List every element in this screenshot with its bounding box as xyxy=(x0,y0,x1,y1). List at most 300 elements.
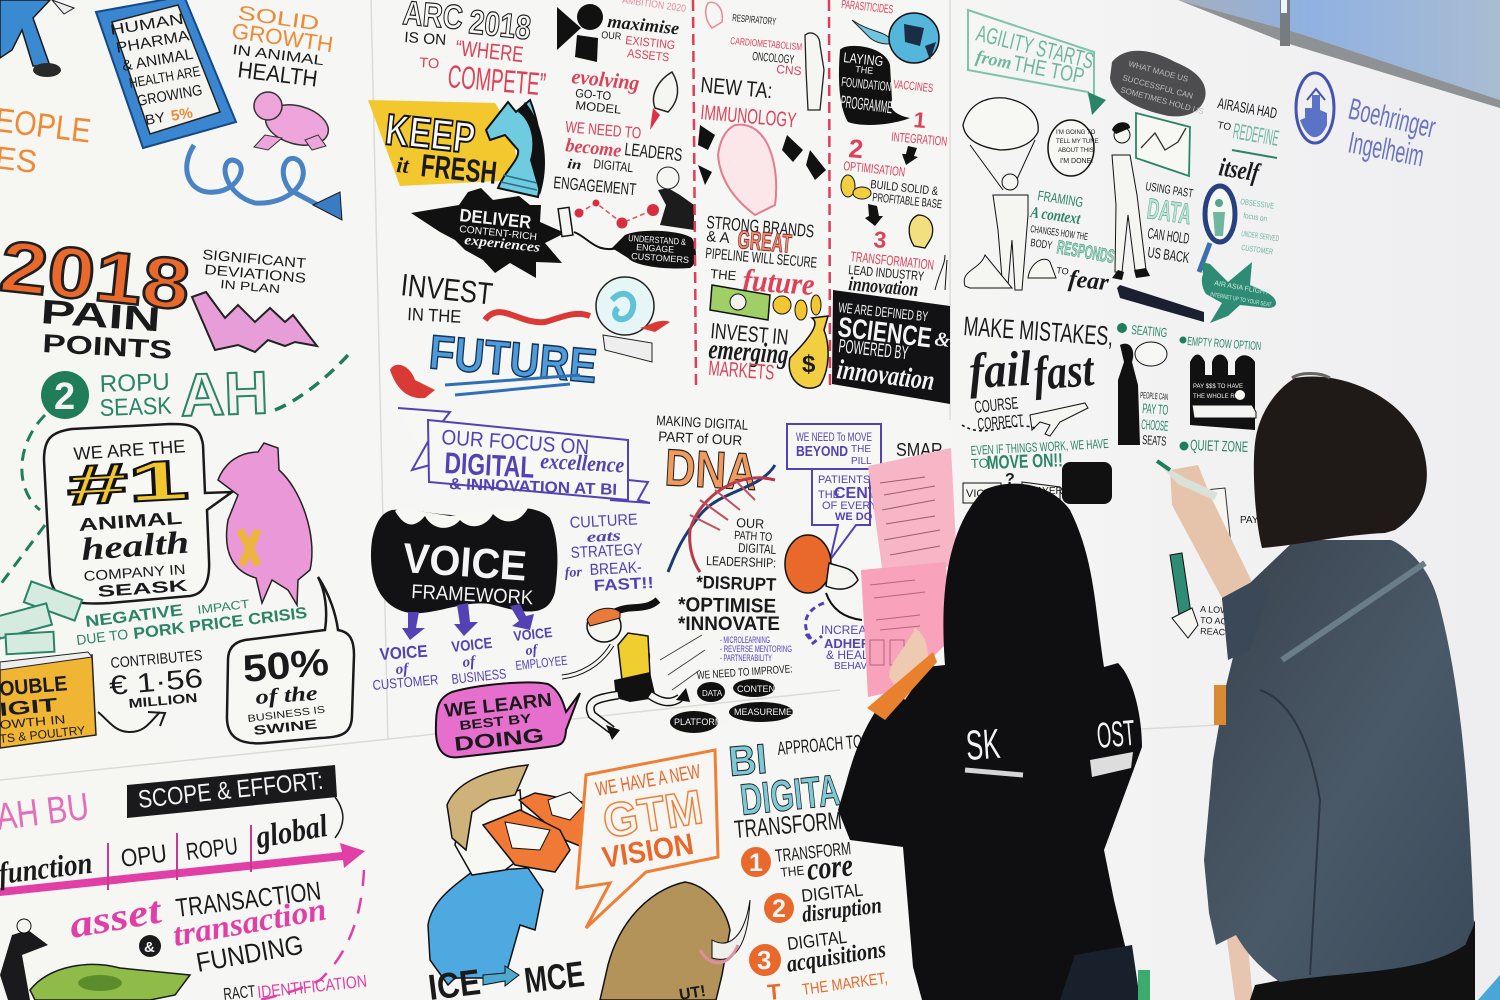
text and icon: maximise existing assets: maximise xyxy=(607,11,680,39)
logo: Boehringer Ingelheim: Ingelheim xyxy=(1346,126,1427,173)
text: our path to digital leadership: PATH TO xyxy=(734,528,773,544)
column: new TA immunology: PIPELINE WILL SECURE xyxy=(705,245,818,272)
text: seating and pay to choose: SEATING xyxy=(1131,322,1168,340)
text: voice of customer, business, employee: VOICE xyxy=(379,642,428,664)
speech cloud: what makes success: WHAT MADE US xyxy=(1127,59,1189,84)
text: solid growth: HEALTH xyxy=(236,56,319,92)
text: framing a context xyxy=(1029,187,1116,296)
panel: human pharma tablet xyxy=(0,0,342,220)
text: ICE to MCE: MCE xyxy=(522,953,587,1000)
starburst: deliver content-rich experiences: CONTENT-RICH xyxy=(459,224,537,243)
text: we need to become leaders in digital engagement: WE NEED TO xyxy=(565,119,642,143)
text: culture eats strategy: eats xyxy=(586,528,621,546)
logo: Boehringer Ingelheim: Boehringer xyxy=(1345,93,1439,145)
text and icon: evolving go-to model: GO-TO xyxy=(575,86,612,103)
illustration: boy with binoculars xyxy=(428,765,600,985)
heading and list: BI digital transformation: TRANSFORM xyxy=(733,807,843,844)
text: asset transaction funding: transaction xyxy=(170,891,329,953)
column: new TA immunology: INVEST IN xyxy=(710,318,789,350)
text: make mistakes fail fast: fast xyxy=(1031,343,1097,401)
text: ICE to MCE xyxy=(426,953,707,1000)
text: negative impact: IMPACT xyxy=(197,597,251,617)
text: culture eats strategy: BREAK- xyxy=(589,559,642,579)
illustration: parachutist with speech bubble: ABOUT THIS xyxy=(1058,148,1094,154)
callout: beyond the pill: WE DO xyxy=(835,511,873,523)
panel: defined by science: SCIENCE xyxy=(836,311,933,353)
text: invest in the future with crystal ball: FUTURE xyxy=(427,326,599,394)
text: quiet zone xyxy=(1180,437,1248,456)
banner: keep it fresh with chess knight: FRESH xyxy=(419,147,499,191)
column: laying the foundation programme: BUILD SOLID & xyxy=(870,177,939,198)
callout: we are the #1 animal health: WE ARE THE xyxy=(73,436,186,464)
heading and list: BI digital transformation: disruption xyxy=(801,892,883,927)
text: our path to digital leadership: OUR xyxy=(736,515,765,531)
panel: human pharma tablet: & ANIMAL xyxy=(121,46,195,75)
sticky note: top xyxy=(868,448,957,590)
callout: beyond the pill: OF EVERYT xyxy=(822,500,884,512)
speech mouth: voice framework xyxy=(371,508,557,613)
starburst: deliver content-rich experiences: experiences xyxy=(464,233,541,256)
callout: we are the #1 animal health: SEASK xyxy=(97,578,189,601)
callout: beyond the pill xyxy=(787,424,900,560)
heading: focus of arc 2018: 2018 xyxy=(467,3,533,47)
banner: double digit growth: OWTH IN xyxy=(0,712,66,732)
text: increase adherence: & HEAL xyxy=(826,648,869,662)
text: invest in the future with crystal ball xyxy=(390,267,670,398)
text: framing a context: BODY xyxy=(1030,237,1053,252)
banner: double digit growth: TS & POULTRY xyxy=(0,723,86,746)
column: new TA immunology: ONCOLOGY xyxy=(752,49,795,67)
text: we need to become leaders in digital engagement xyxy=(553,119,683,199)
person: woman in black hoodie: OST xyxy=(1095,712,1137,756)
speech mouth: voice framework: FRAMEWORK xyxy=(411,581,534,609)
callout: beyond the pill: WE NEED To MOVE xyxy=(796,430,872,444)
text: our path to digital leadership: *OPTIMISE xyxy=(678,594,776,618)
heading and list: BI digital transformation: 3 xyxy=(757,945,771,975)
panel: defined by science xyxy=(832,290,952,404)
text: smart fragment: SMAR- xyxy=(896,440,948,460)
column: new TA immunology: CNS xyxy=(776,62,802,78)
callout: new GTM vision: GTM xyxy=(599,781,706,849)
illustration: runner xyxy=(562,600,705,740)
heading: 2018 pain points: 2018 xyxy=(0,226,194,326)
text: low cost fragment with tag icon: PAY xyxy=(1240,515,1259,526)
text: low cost fragment with tag icon xyxy=(1170,488,1259,638)
column: laying the foundation programme: INTEGRATION xyxy=(891,129,948,149)
panel: human pharma tablet: HUMAN xyxy=(109,11,185,39)
text: airasia had to redefine itself: TO xyxy=(1216,120,1232,133)
text: we need to become leaders in digital engagement: become xyxy=(564,135,623,162)
heading: focus of arc 2018: IS ON xyxy=(404,29,447,49)
photo of graphic recording wall: REDEFINE xyxy=(1231,118,1281,151)
heading and list: BI digital transformation xyxy=(727,732,889,1000)
icon: magnifying glass: UNDER SERVED xyxy=(1241,229,1280,243)
text: asset transaction funding: asset xyxy=(66,889,166,947)
text: invest in the future with crystal ball: IN THE xyxy=(407,304,462,327)
icon: magnifying glass: focus on xyxy=(1243,211,1268,223)
banner: double digit growth: OUBLE xyxy=(0,672,68,701)
text: invest in the future with crystal ball: INVEST xyxy=(399,267,494,312)
callout: we learn best by doing: WE LEARN xyxy=(443,690,553,722)
column: new TA immunology: NEW TA: xyxy=(700,72,773,103)
column: new TA immunology: CARDIOMETABOLISM xyxy=(730,36,802,53)
heading and list: BI digital transformation: 2 xyxy=(772,895,786,923)
text: voice of customer, business, employee: VOICE xyxy=(513,624,553,644)
column: new TA immunology: GREAT xyxy=(736,224,793,259)
window strip top right xyxy=(1178,0,1500,108)
heading and list: BI digital transformation: DIGITAL xyxy=(800,880,864,906)
text: our path to digital leadership: DIGITAL xyxy=(738,540,777,557)
text: we need to become leaders in digital engagement: DIGITAL xyxy=(593,156,634,175)
text: low cost fragment with tag icon: A LOW C xyxy=(1200,604,1238,616)
column: laying the foundation programme: 2 xyxy=(847,133,865,164)
column: new TA immunology xyxy=(698,2,828,388)
illustration: man and data chart: USING PAST xyxy=(1145,179,1195,201)
panel: defined by science: & xyxy=(933,328,952,352)
text: ROPU SEASK AH xyxy=(0,355,348,585)
text: ROPU SEASK AH: SEASK xyxy=(99,393,172,422)
panel: defined by science: POWERED BY xyxy=(837,336,909,364)
callout: new GTM vision: VISION xyxy=(600,828,696,875)
text: ROPU SEASK AH: AH xyxy=(179,359,269,429)
banner: keep it fresh with chess knight: it xyxy=(396,152,411,178)
panel: human pharma tablet: HEALTH ARE xyxy=(128,63,201,91)
text: voice of customer, business, employee: EMPLOYEE xyxy=(515,653,568,673)
text: our path to digital leadership: *DISRUPT xyxy=(696,572,777,595)
banner: our focus on digital excellence: excellence xyxy=(540,448,625,477)
text: seating and pay to choose: SEATS xyxy=(1142,432,1167,449)
text and bubbles: we need to improve: CONTENT xyxy=(737,684,781,694)
callout: beyond the pill: THE xyxy=(851,444,871,455)
illustration: parachutist with speech bubble: TELL MY TUNE xyxy=(1056,139,1099,145)
text: make mistakes fail fast: EVEN IF THINGS WORK, WE HAVE xyxy=(970,436,1109,458)
panel: human pharma tablet: BY xyxy=(144,109,167,128)
text: victim player xyxy=(963,471,1063,503)
data line and speech bubble: understand and engage customers: UNDERSTAND & xyxy=(628,233,686,247)
text and icon: evolving go-to model: evolving xyxy=(570,64,641,95)
text and chart: significant deviations in plan: IN PLAN xyxy=(220,277,281,296)
text: negative impact: NEGATIVE xyxy=(84,602,184,631)
text and bubbles: we need to improve xyxy=(670,663,805,733)
heading and list: BI digital transformation: DIGITAL xyxy=(786,927,848,954)
text: contributes 1.56 million xyxy=(98,647,204,732)
icon: magnifying glass: OBSESSIVE xyxy=(1240,197,1275,211)
text: victim player: ? xyxy=(1005,471,1015,488)
text: increase adherence xyxy=(821,623,882,672)
speech mouth: voice framework: VOICE xyxy=(401,534,528,590)
heading: focus of arc 2018: TO xyxy=(419,54,440,71)
illustration: man and data chart: DATA xyxy=(1145,193,1193,231)
text: negative impact: PORK PRICE CRISIS xyxy=(132,605,309,643)
text: voice of customer, business, employee: of xyxy=(395,661,411,678)
speech cloud: what makes success: SUCCESSFUL CAN xyxy=(1121,73,1194,101)
text: contributes 1.56 million: CONTRIBUTES xyxy=(110,647,203,672)
timeline arrow: function OPU ROPU global xyxy=(0,807,365,1000)
illustration: parachutist with speech bubble xyxy=(963,98,1099,290)
banner: agility starts from the top: AGILITY STARTS xyxy=(974,20,1097,74)
text: solid growth xyxy=(230,2,335,92)
callout: 50% of the business is swine xyxy=(227,577,354,743)
text and icon: empty row option: PAY $$$ TO HAVE xyxy=(1193,384,1243,390)
banner: agility starts from the top: THE TOP xyxy=(1011,50,1086,89)
banner: keep it fresh with chess knight xyxy=(368,100,545,197)
label: scope and effort: SCOPE & EFFORT: xyxy=(137,767,325,814)
panel: human pharma tablet: GROWING xyxy=(136,82,204,110)
person legs xyxy=(0,0,50,66)
text and bubbles: we need to improve: PLATFORMS xyxy=(674,717,728,727)
text: make mistakes fail fast: CORRECT xyxy=(977,411,1024,434)
text: our path to digital leadership: LEADERSHIP: xyxy=(706,553,776,570)
heading: 2018 pain points: POINTS xyxy=(42,328,173,365)
data line and speech bubble: understand and engage customers xyxy=(558,167,696,269)
speech cloud: what makes success: SOMETIMES HOLD US xyxy=(1119,85,1205,116)
icon: flying pink pig xyxy=(254,92,333,152)
callout: 50% of the business is swine: of the xyxy=(255,681,318,709)
heading and list: BI digital transformation: 1 xyxy=(749,849,763,877)
text and chart: significant deviations in plan: SIGNIFICANT xyxy=(202,246,307,271)
column: laying the foundation programme: TRANSFORMATION xyxy=(850,248,935,273)
column: laying the foundation programme: FOUNDATION xyxy=(841,74,892,94)
callout: we are the #1 animal health: ANIMAL xyxy=(78,508,183,535)
photo of graphic recording wall: PEOPLE CAN xyxy=(1140,390,1168,402)
text and icon: maximise existing assets xyxy=(557,0,687,64)
illustration: woolly mammoth xyxy=(600,882,750,1000)
text: voice of customer, business, employee: VOICE xyxy=(451,635,493,656)
text: increase adherence: ADHER xyxy=(824,636,871,651)
panel seams xyxy=(0,0,1220,780)
callout: we are the #1 animal health: COMPANY IN xyxy=(83,561,186,584)
text: voice of customer, business, employee: BUSINESS xyxy=(451,665,507,687)
panel: defined by science: innovation xyxy=(835,354,936,397)
heading and list: BI digital transformation: BI xyxy=(727,735,769,785)
text: solid growth: IN ANIMAL xyxy=(232,41,325,68)
callout: we learn best by doing: DOING xyxy=(453,725,545,756)
heading and list: BI digital transformation: TRANSFORM xyxy=(774,838,852,866)
column: laying the foundation programme: LEAD INDUSTRY xyxy=(848,262,925,284)
icon: black square xyxy=(1062,462,1112,504)
text: make mistakes fail fast: fail xyxy=(968,340,1033,399)
timeline arrow: function OPU ROPU global: OPU xyxy=(119,840,168,873)
text: culture eats strategy xyxy=(564,511,654,595)
column: new TA immunology: future xyxy=(742,262,816,302)
banner: keep it fresh with chess knight: KEEP xyxy=(383,105,478,163)
text and icon: maximise existing assets: OUR xyxy=(601,30,622,43)
timeline arrow: function OPU ROPU global: ROPU xyxy=(184,833,239,866)
heading: focus of arc 2018 xyxy=(401,0,547,103)
callout: we are the #1 animal health: health xyxy=(80,524,190,567)
text: increase adherence: INCREASE xyxy=(821,623,882,637)
text and icon: evolving go-to model: MODEL xyxy=(575,98,622,117)
text: solid growth: GROWTH xyxy=(230,18,335,57)
icon: running man on green money xyxy=(0,919,190,1000)
callout: beyond the pill: THE xyxy=(818,489,840,501)
column: new TA immunology: & A xyxy=(706,228,730,247)
illustration: man and data chart: US BACK xyxy=(1146,244,1190,267)
callout: new GTM vision: WE HAVE A NEW xyxy=(594,761,702,801)
text: asset transaction funding: TRANSACTION xyxy=(174,875,323,923)
heading: focus of arc 2018: “WHERE xyxy=(454,35,525,67)
text: framing a context: TO xyxy=(1056,265,1069,277)
text: voice of customer, business, employee xyxy=(372,603,568,693)
callout: beyond the pill: BEYOND xyxy=(796,443,848,460)
heading: making digital part of our DNA: PART of OUR xyxy=(658,428,743,448)
text and chart: significant deviations in plan: DEVIATIONS xyxy=(204,261,307,286)
text: negative impact: DUE TO xyxy=(75,626,129,648)
text: low cost fragment with tag icon: TO ACQ xyxy=(1200,615,1234,627)
illustration: green airplane: INTERNET UP TO YOUR SEAT xyxy=(1210,292,1272,309)
heading and list: BI digital transformation: THE xyxy=(780,863,805,880)
text: voice of customer, business, employee: of xyxy=(525,643,539,659)
stethoscope tube xyxy=(187,145,318,205)
heading and list: BI digital transformation: APPROACH TO xyxy=(777,732,863,760)
illustration: parachutist with speech bubble: I'M GOING TO xyxy=(1056,130,1096,136)
heading and list: BI digital transformation: acquisitions xyxy=(785,937,888,978)
text: culture eats strategy: for xyxy=(564,565,583,581)
text: ROPU SEASK AH: ROPU xyxy=(99,369,170,398)
text: make mistakes fail fast: MOVE ON!! xyxy=(986,450,1063,474)
text: seating and pay to choose xyxy=(1117,322,1169,449)
text: negative impact xyxy=(75,597,309,648)
icon: magnifying glass xyxy=(1199,186,1280,272)
column: laying the foundation programme: THE xyxy=(855,64,874,76)
callout: beyond the pill: CENTRE xyxy=(834,485,900,502)
starburst: deliver content-rich experiences: DELIVER xyxy=(459,205,532,233)
text: our path to digital leadership: *INNOVATE xyxy=(678,614,780,635)
callout: 50% of the business is swine: SWINE xyxy=(253,716,318,738)
text: we need to become leaders in digital engagement: in xyxy=(567,157,582,173)
person: woman in black hoodie: SK xyxy=(964,720,1002,769)
column: laying the foundation programme: PROGRAMME xyxy=(840,92,893,117)
text and bubbles: we need to improve: DATA xyxy=(702,689,723,698)
column: laying the foundation programme: PROFITABLE BASE xyxy=(872,190,943,211)
text: our path to digital leadership xyxy=(678,515,792,663)
column: new TA immunology: THE xyxy=(710,266,737,283)
text and chart: significant deviations in plan xyxy=(192,246,317,352)
callout: we learn best by doing xyxy=(436,682,580,757)
text and icon: maximise existing assets: ASSETS xyxy=(627,46,670,64)
column: new TA immunology: MARKETS xyxy=(708,357,775,385)
text: framing a context: RESPONDS xyxy=(1055,237,1116,268)
banner: our focus on digital excellence: DIGITAL xyxy=(444,447,535,485)
data line and speech bubble: understand and engage customers: ENGAGE xyxy=(636,242,674,255)
text: airasia had to redefine itself: AIRASIA HAD xyxy=(1216,95,1278,122)
text: voice of customer, business, employee: CUSTOMER xyxy=(372,671,439,693)
callout: we are the #1 animal health: #1 xyxy=(65,448,190,517)
text and icon: empty row option: EMPTY ROW OPTION xyxy=(1187,334,1262,353)
illustration: green airplane: AIR ASIA FLIGHT xyxy=(1214,280,1270,297)
text: we need to become leaders in digital engagement: ENGAGEMENT xyxy=(553,173,637,199)
text: make mistakes fail fast: MAKE MISTAKES, xyxy=(963,311,1114,351)
column: new TA immunology: STRONG BRANDS xyxy=(706,212,815,241)
text: contributes 1.56 million: € 1·56 xyxy=(108,663,204,701)
column: laying the foundation programme: 1 xyxy=(913,107,927,133)
panel: defined by science: WE ARE DEFINED BY xyxy=(838,299,929,324)
text: culture eats strategy: CULTURE xyxy=(569,511,638,532)
callout: beyond the pill: PATIENTS AT xyxy=(818,474,886,486)
text and icon: empty row option: THE WHOLE ROW xyxy=(1193,394,1245,400)
data line and speech bubble: understand and engage customers: CUSTOMERS xyxy=(631,251,689,265)
callout: new GTM vision xyxy=(577,750,718,928)
text: low cost fragment with tag icon: REACH xyxy=(1200,626,1232,638)
text: our path to digital leadership: - MICROLEARNING xyxy=(720,635,770,645)
heading: 2018 pain points xyxy=(0,226,194,365)
timeline arrow: function OPU ROPU global: global xyxy=(252,807,330,855)
heading: making digital part of our DNA: MAKING DIGITAL xyxy=(656,412,749,433)
text and icon: evolving go-to model xyxy=(570,64,678,130)
illustration: parachutist with speech bubble: I'M DONE! xyxy=(1060,158,1093,165)
icon: money stack xyxy=(0,581,82,654)
icon: DNA helix xyxy=(668,465,775,572)
heading: 2018 pain points: PAIN xyxy=(39,293,162,339)
column: laying the foundation programme: VACCINES xyxy=(893,77,934,95)
text: make mistakes fail fast: TO xyxy=(971,455,989,471)
callout: 50% of the business is swine: BUSINESS IS xyxy=(247,705,326,725)
text: our path to digital leadership: - PARTNERABILITY xyxy=(720,653,772,663)
logo: Boehringer Ingelheim xyxy=(1296,73,1439,173)
text and icon: maximise existing assets: EXISTING xyxy=(625,33,676,52)
speech cloud: what makes success xyxy=(1110,51,1206,116)
text: asset transaction funding xyxy=(66,875,368,1000)
heading and list: BI digital transformation: core xyxy=(805,846,854,887)
text: framing a context: A context xyxy=(1029,204,1082,228)
callout: 50% of the business is swine: 50% xyxy=(241,642,330,691)
text: framing a context: CHANGES HOW THE xyxy=(1030,224,1089,243)
text: quiet zone: QUIET ZONE xyxy=(1190,437,1248,456)
text: make mistakes fail fast xyxy=(962,311,1114,474)
text and bubbles: we need to improve: MEASUREMENT xyxy=(734,707,805,717)
sticky note: bottom xyxy=(861,562,950,697)
icon: pink pig with bandage xyxy=(218,443,312,605)
callout: we learn best by doing: BEST BY xyxy=(459,710,532,733)
illustration: man and data chart: CAN HOLD xyxy=(1146,225,1190,248)
photo of graphic recording wall: CHOOSE xyxy=(1141,416,1169,434)
heading: focus of arc 2018: COMPETE” xyxy=(446,58,547,103)
column: laying the foundation programme: OPTIMISATION xyxy=(843,158,906,179)
banner: our focus on digital excellence xyxy=(398,408,650,503)
column: new TA immunology: IMMUNOLOGY xyxy=(700,101,797,132)
text: make mistakes fail fast: COURSE xyxy=(973,393,1019,417)
column: new TA immunology: emerging xyxy=(708,334,789,371)
text: victim player: PLAYER xyxy=(1024,486,1063,497)
banner: our focus on digital excellence: & INNOVATION AT BI xyxy=(449,476,617,499)
illustration: man and data chart xyxy=(1112,113,1204,322)
text: asset transaction funding: FUNDING xyxy=(194,930,305,978)
text: culture eats strategy: FAST!! xyxy=(593,575,654,595)
heading and list: BI digital transformation: THE MARKET, xyxy=(801,970,889,999)
divider: red dashed columns xyxy=(693,0,830,385)
label: scope and effort xyxy=(127,765,343,838)
text: airasia had to redefine itself: itself xyxy=(1217,152,1263,187)
column: laying the foundation programme: 3 xyxy=(873,226,888,253)
heading: making digital part of our DNA xyxy=(656,412,758,502)
banner: our focus on digital excellence: OUR FOCUS ON xyxy=(441,426,590,459)
text: voice of customer, business, employee: of xyxy=(462,654,478,671)
text: framing a context: fear xyxy=(1067,266,1111,296)
text and bubbles: we need to improve: WE NEED TO IMPROVE: xyxy=(696,663,793,682)
panel: human pharma tablet: PHARMA xyxy=(115,27,191,57)
banner: agility starts from the top: from xyxy=(974,46,1013,73)
heading: making digital part of our DNA: DNA xyxy=(663,439,758,502)
column: laying the foundation programme: LAYING xyxy=(843,49,884,69)
column: new TA immunology: $ xyxy=(802,351,816,378)
text: we need to become leaders in digital engagement: LEADERS xyxy=(624,139,683,165)
text: solid growth: SOLID xyxy=(236,2,321,35)
callout: beyond the pill: PILL xyxy=(851,456,872,467)
callout: we are the #1 animal health xyxy=(44,424,232,604)
text: framing a context: FRAMING xyxy=(1037,187,1084,210)
illustration: green airplane xyxy=(1202,262,1276,323)
column: new TA immunology: RESPIRATORY xyxy=(732,13,777,28)
